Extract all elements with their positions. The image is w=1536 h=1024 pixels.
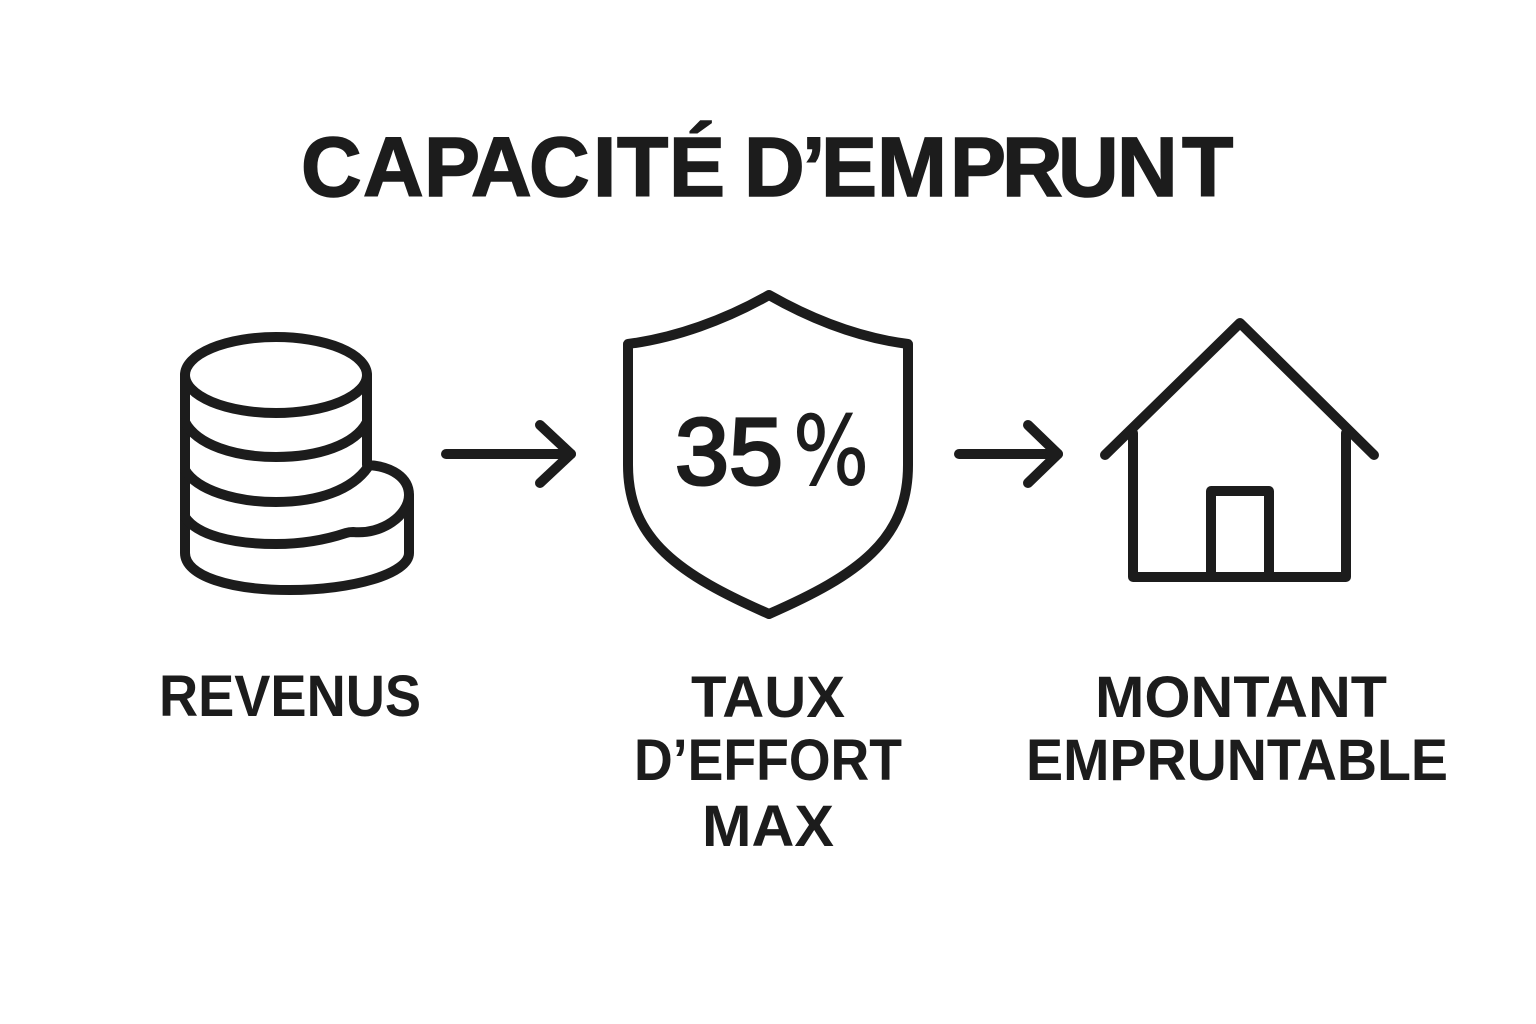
label: taux d'effort max: MAX bbox=[702, 794, 834, 859]
label: taux d'effort max: D’EFFORT bbox=[634, 728, 902, 793]
label: taux d'effort max: TAUX bbox=[691, 665, 845, 730]
title: CAPACITÉ D’EMPRUNT bbox=[301, 120, 1233, 214]
label: montant empruntable: EMPRUNTABLE bbox=[1026, 728, 1448, 793]
label: revenus: REVENUS bbox=[159, 664, 421, 729]
label: montant empruntable bbox=[1026, 665, 1448, 793]
icon: coin stack bbox=[185, 337, 409, 590]
label: taux d'effort max bbox=[634, 665, 902, 859]
shield percentage bbox=[675, 397, 869, 507]
label: montant empruntable: MONTANT bbox=[1095, 665, 1387, 730]
shield percentage: 35 bbox=[675, 399, 783, 505]
arrow: revenus to taux bbox=[446, 425, 571, 483]
icon: shield bbox=[628, 295, 908, 614]
shield percentage: % bbox=[793, 397, 869, 507]
icon: house bbox=[1105, 323, 1374, 577]
arrow: taux to montant bbox=[959, 425, 1058, 483]
